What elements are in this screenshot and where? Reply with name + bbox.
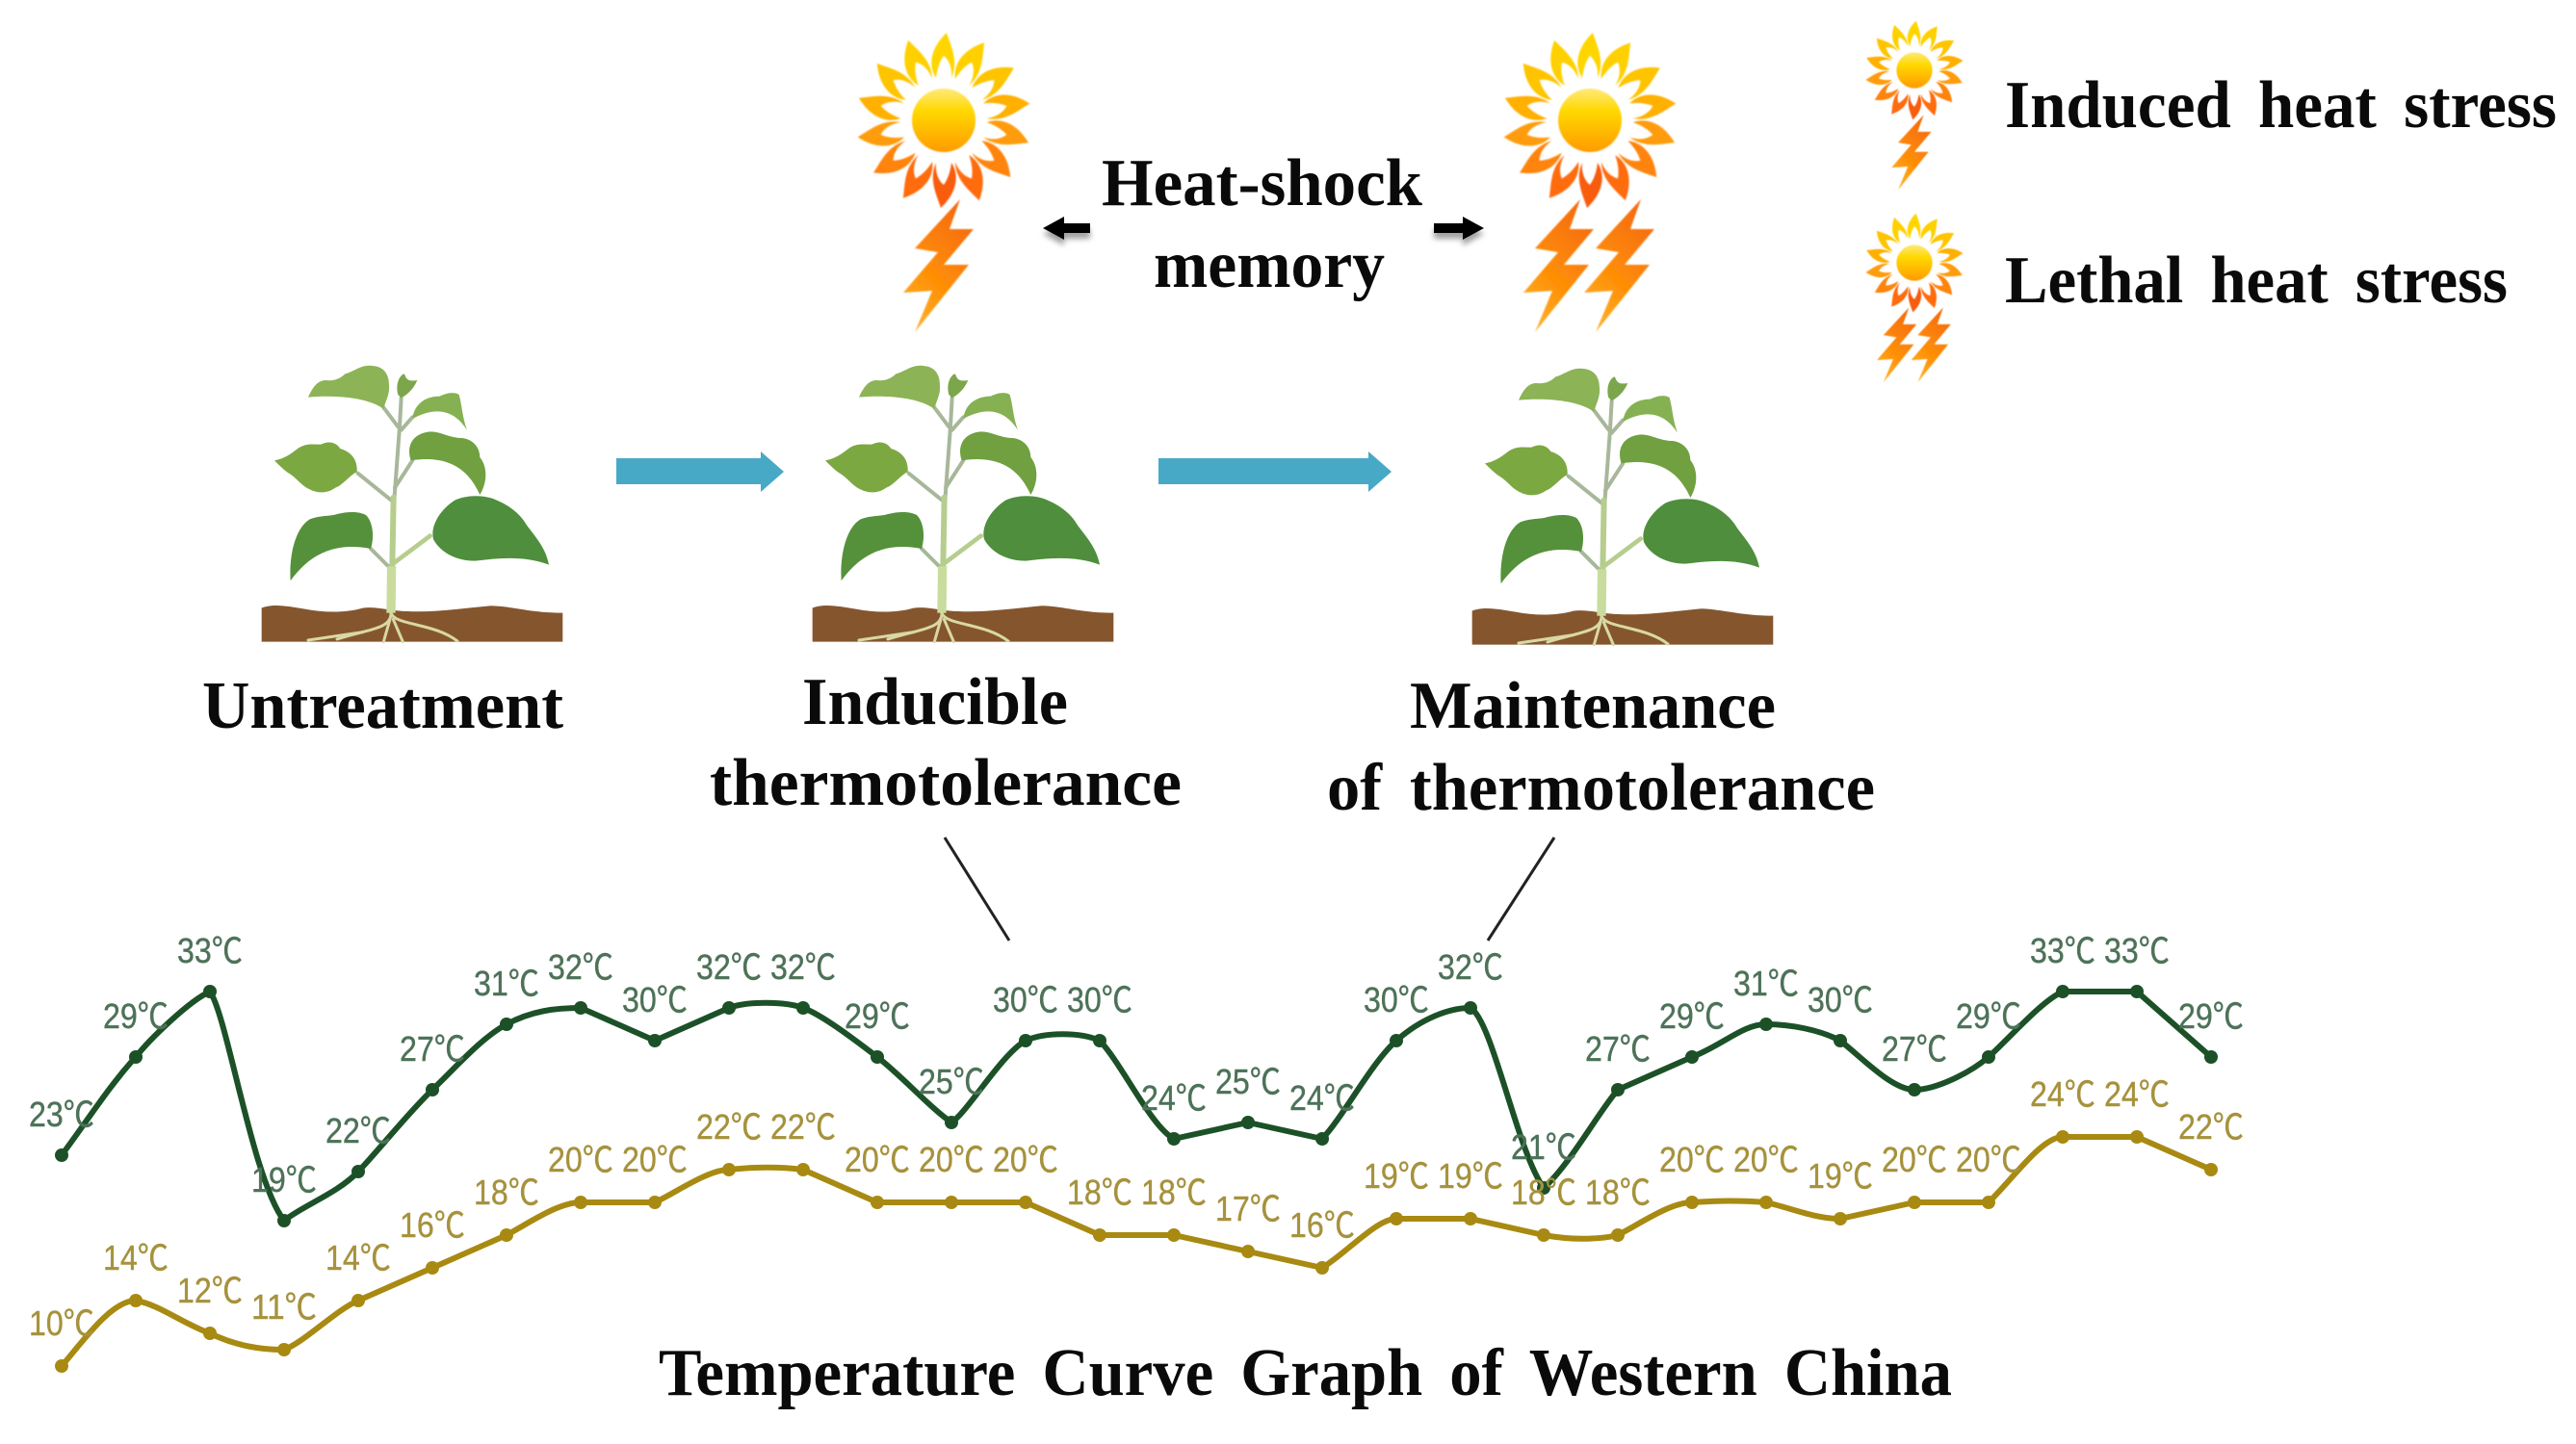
plant: maintenance of thermotolerance	[1472, 369, 1773, 645]
data labels: low temperature: 20℃	[845, 1140, 910, 1179]
data labels: high temperature: 30℃	[993, 980, 1058, 1019]
label: inducible thermotolerance: thermotolerance	[710, 746, 1182, 820]
data labels: low temperature: 24℃	[2104, 1074, 2170, 1114]
data labels: high temperature: 32℃	[548, 947, 613, 987]
label: inducible thermotolerance: Inducible	[802, 665, 1068, 739]
connector: maintenance of thermotolerance to curve	[1488, 838, 1554, 941]
legend: induced heat stress: Induced heat stress	[2005, 68, 2557, 142]
data labels: high temperature: 29℃	[2178, 996, 2244, 1036]
data labels: high temperature: 29℃	[1659, 996, 1725, 1036]
chart title: Temperature Curve Graph of Western China	[659, 1336, 1952, 1410]
arrow: inducible to maintenance of thermotolerance	[1158, 451, 1392, 492]
data labels: low temperature: 20℃	[1882, 1140, 1947, 1179]
heading: heat-shock memory	[1102, 146, 1422, 302]
data labels: low temperature: 20℃	[1956, 1140, 2021, 1179]
data labels: high temperature: 31℃	[474, 964, 539, 1003]
data labels: high temperature: 30℃	[1364, 980, 1429, 1019]
data labels: low temperature: 22℃	[2178, 1107, 2244, 1147]
data labels: high temperature: 25℃	[1215, 1062, 1281, 1101]
data labels: low temperature: 12℃	[177, 1271, 243, 1310]
data labels: high temperature: 32℃	[696, 947, 762, 987]
data labels: low temperature: 14℃	[325, 1238, 391, 1277]
data labels: low temperature	[29, 1074, 2244, 1343]
label: maintenance of thermotolerance	[1327, 669, 1875, 825]
data labels: high temperature: 27℃	[400, 1029, 465, 1069]
data labels: low temperature: 18℃	[1067, 1173, 1132, 1212]
data labels: low temperature: 22℃	[770, 1107, 836, 1147]
data labels: high temperature: 22℃	[325, 1111, 391, 1150]
data labels: high temperature: 19℃	[251, 1160, 317, 1199]
data labels: high temperature: 30℃	[622, 980, 688, 1019]
label: maintenance of thermotolerance: of thermotolerance	[1327, 751, 1875, 825]
data labels: high temperature: 29℃	[103, 996, 169, 1036]
arrow: heat-shock memory pointing right	[1434, 217, 1484, 240]
data labels: low temperature: 16℃	[1289, 1205, 1355, 1245]
data labels: low temperature: 20℃	[993, 1140, 1058, 1179]
connector: inducible thermotolerance to curve	[945, 838, 1009, 941]
data labels: low temperature: 18℃	[1511, 1173, 1576, 1212]
plant: inducible thermotolerance	[813, 366, 1113, 642]
data labels: low temperature: 19℃	[1438, 1156, 1503, 1196]
data labels: high temperature: 30℃	[1808, 980, 1873, 1019]
heading: heat-shock memory: memory	[1154, 228, 1385, 302]
label: maintenance of thermotolerance: Maintenance	[1410, 669, 1776, 743]
data labels: low temperature: 18℃	[474, 1173, 539, 1212]
data labels: low temperature: 20℃	[1733, 1140, 1799, 1179]
line chart: low temperature curve	[55, 1130, 2218, 1373]
data labels: high temperature	[29, 931, 2244, 1199]
data labels: high temperature: 30℃	[1067, 980, 1132, 1019]
data labels: low temperature: 20℃	[548, 1140, 613, 1179]
data labels: low temperature: 18℃	[1585, 1173, 1651, 1212]
data labels: low temperature: 19℃	[1364, 1156, 1429, 1196]
data labels: low temperature: 19℃	[1808, 1156, 1873, 1196]
legend: induced heat stress	[1864, 21, 2557, 190]
heading: heat-shock memory: Heat-shock	[1102, 146, 1422, 220]
data labels: low temperature: 24℃	[2030, 1074, 2095, 1114]
data labels: high temperature: 24℃	[1141, 1078, 1207, 1118]
legend: lethal heat stress: Lethal heat stress	[2005, 244, 2508, 318]
data labels: low temperature: 17℃	[1215, 1189, 1281, 1228]
data labels: high temperature: 33℃	[2104, 931, 2170, 970]
legend: lethal heat stress	[1864, 214, 2508, 382]
data labels: high temperature: 32℃	[1438, 947, 1503, 987]
data labels: high temperature: 33℃	[2030, 931, 2095, 970]
label: inducible thermotolerance	[710, 665, 1182, 820]
data labels: high temperature: 32℃	[770, 947, 836, 987]
data labels: high temperature: 33℃	[177, 931, 243, 970]
data labels: low temperature: 14℃	[103, 1238, 169, 1277]
data labels: low temperature: 22℃	[696, 1107, 762, 1147]
data labels: low temperature: 20℃	[622, 1140, 688, 1179]
arrow: heat-shock memory pointing left	[1043, 217, 1090, 240]
data labels: high temperature: 27℃	[1882, 1029, 1947, 1069]
data labels: low temperature: 10℃	[29, 1303, 94, 1343]
data labels: low temperature: 20℃	[1659, 1140, 1725, 1179]
data labels: high temperature: 25℃	[919, 1062, 984, 1101]
data labels: low temperature: 11℃	[251, 1287, 317, 1327]
data labels: high temperature: 27℃	[1585, 1029, 1651, 1069]
data labels: high temperature: 23℃	[29, 1095, 94, 1134]
icon: lethal heat stress sun with two bolts	[1501, 33, 1678, 332]
data labels: low temperature: 20℃	[919, 1140, 984, 1179]
data labels: high temperature: 21℃	[1511, 1127, 1576, 1167]
data labels: high temperature: 29℃	[1956, 996, 2021, 1036]
label: untreatment: Untreatment	[202, 669, 563, 743]
data labels: low temperature: 16℃	[400, 1205, 465, 1245]
data labels: high temperature: 31℃	[1733, 964, 1799, 1003]
data labels: high temperature: 29℃	[845, 996, 910, 1036]
line chart: high temperature curve	[55, 985, 2218, 1227]
arrow: untreatment to inducible thermotolerance	[616, 451, 784, 492]
data labels: low temperature: 18℃	[1141, 1173, 1207, 1212]
icon: induced heat stress sun with one bolt	[855, 33, 1032, 332]
data labels: high temperature: 24℃	[1289, 1078, 1355, 1118]
plant: untreatment	[262, 366, 562, 642]
